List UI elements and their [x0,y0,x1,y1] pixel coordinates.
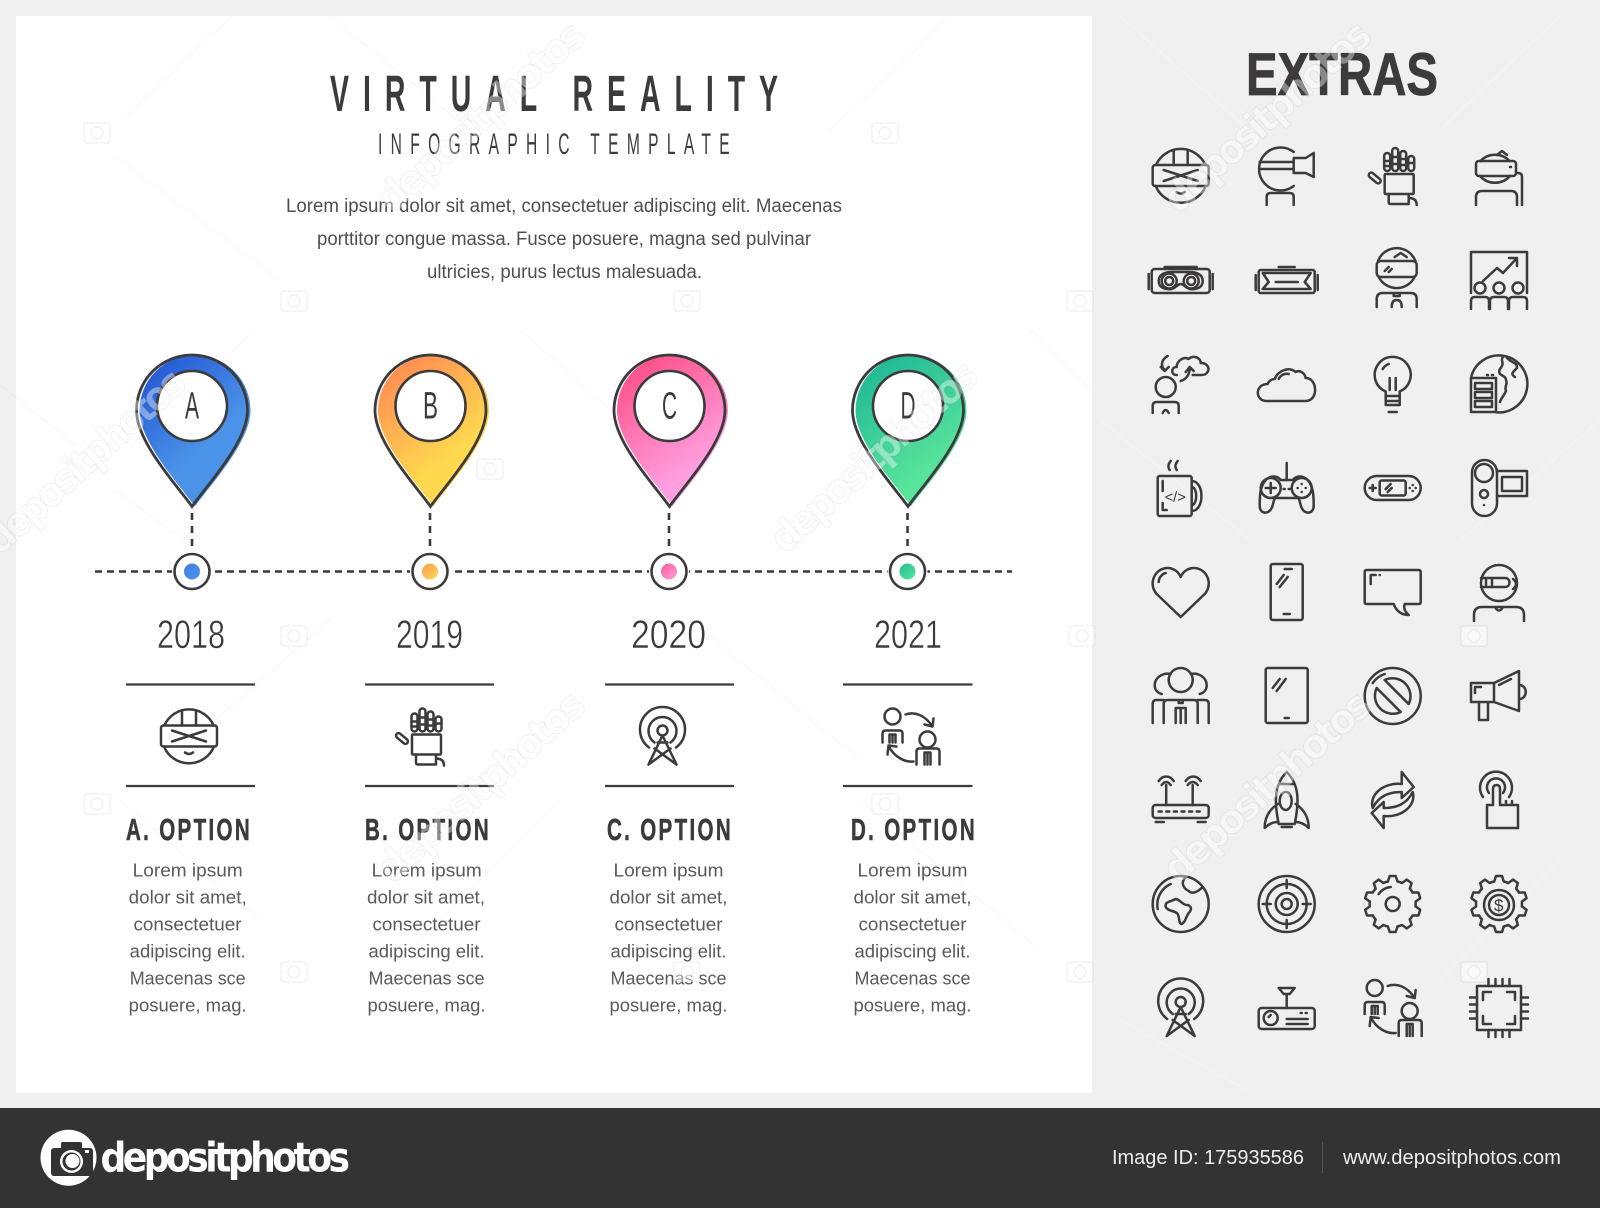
icon: binocular goggles [1149,267,1213,293]
icon: wifi router [1153,776,1209,822]
intro text block: porttitor congue massa. Fusce posuere, magna sed pulvinar [317,229,812,250]
icon: VR head [161,709,217,763]
intro text block: Lorem ipsum dolor sit amet, consectetuer adipiscing elit. Maecenas [286,196,842,217]
watermarks [0,13,1487,982]
year 2021: 2021 [874,613,942,657]
column B: 2019 [365,355,494,1016]
icon: headset front [1256,267,1318,293]
logo mark [40,1130,96,1186]
icon: VR camera user [1259,148,1314,205]
image id: Image ID: 175935586 [1112,1147,1304,1169]
icon: refresh arrows [1372,772,1414,828]
icon: team [1153,668,1209,723]
text B [367,860,486,1016]
pin B: B [423,386,438,428]
year 2020: 2020 [631,613,706,657]
pin A: A [185,386,199,428]
icon: radio tower [1158,978,1203,1036]
pin A [136,355,250,506]
text A: consectetuer [134,914,242,934]
icon: smartphone [1271,564,1303,620]
intro text block [286,196,842,283]
icon: satellite receiver [1259,988,1315,1029]
icon: gear [1363,876,1422,932]
icon: speech bubble [1365,570,1421,615]
connector and node B [410,513,450,592]
icon: VR glove [395,708,444,766]
icon: heart [1153,568,1209,617]
icon: money gear [1469,876,1529,932]
text C [610,860,728,1016]
icon: target [1259,876,1315,932]
text D: Maecenas sce [854,968,970,988]
year 2019: 2019 [396,613,463,657]
icon: person with side headset [1474,565,1524,621]
icon: VR glove [1368,148,1417,205]
text A: adipiscing elit. [130,942,246,962]
text A [129,860,247,1016]
column D: 2021 [843,355,977,1016]
text B: Lorem ipsum [372,860,482,880]
text C: posuere, mag. [610,996,728,1016]
icon: globe server [1471,355,1527,412]
text C: dolor sit amet, [610,888,728,908]
pin C: C [662,386,677,428]
icon: touch hand [1480,772,1518,828]
text D: adipiscing elit. [854,942,970,962]
icon: code mug [1158,461,1201,516]
pin D [852,355,966,506]
text D: posuere, mag. [854,996,972,1016]
watermarks: depositphotos [368,683,593,892]
pin D: D [900,386,916,428]
footer bar [0,1108,1600,1208]
icon: prohibited sign [1365,668,1421,724]
text A: dolor sit amet, [129,888,247,908]
connector and node C [649,513,689,592]
icon: people exchange [1365,980,1422,1036]
text D [854,860,972,1016]
text C: Maecenas sce [610,968,726,988]
column A: 2018 [126,355,255,1016]
icon: people exchange [882,708,940,764]
title: VIRTUAL REALITY [330,65,792,122]
watermarks: depositphotos [1154,13,1379,222]
text B: dolor sit amet, [367,888,485,908]
watermarks: depositphotos [368,13,593,222]
pin C [614,355,728,506]
icon: megaphone [1471,671,1526,720]
icon: presentation chart audience [1471,252,1527,309]
text D: consectetuer [858,914,967,934]
text D: dolor sit amet, [854,888,972,908]
heading B: B. OPTION [365,812,491,847]
text C: adipiscing elit. [610,942,726,962]
text C: Lorem ipsum [614,860,724,880]
logo wordmark: depositphotos [100,1134,349,1182]
heading A: A. OPTION [126,812,252,847]
icon: rocket [1265,772,1309,828]
text B: posuere, mag. [368,996,486,1016]
text B: consectetuer [372,914,481,934]
watermarks: depositphotos [1154,683,1379,892]
text C: consectetuer [614,914,723,934]
column C: 2020 [605,355,734,1016]
icon: code mug: </> [1165,489,1186,506]
connector and node D [888,513,928,592]
panel: extras icon grid [1149,41,1529,1037]
extras heading: EXTRAS [1246,41,1438,108]
pin B [375,355,489,506]
watermarks: depositphotos [761,353,986,562]
icon: money gear: $ [1494,896,1504,915]
icon: brainstorm person [1153,356,1208,413]
icon: gamepad [1260,463,1314,513]
icon: processor chip [1470,979,1528,1037]
icon: handheld console [1365,476,1421,500]
icon: cloud [1258,369,1315,401]
text B: adipiscing elit. [368,942,484,962]
connector and node A [172,513,212,592]
icon: globe [1153,876,1209,932]
text A: Maecenas sce [130,968,246,988]
icon: light bulb [1375,357,1411,412]
site url: www.depositphotos.com [1342,1147,1561,1169]
text B: Maecenas sce [368,968,484,988]
heading C: C. OPTION [607,812,733,847]
timeline dashed axis [95,570,1012,573]
text A: Lorem ipsum [133,860,243,880]
intro text block: ultricies, purus lectus malesuada. [427,262,702,283]
icon: headset user with cable [1476,151,1522,205]
year 2018: 2018 [157,613,225,657]
icon: goggles person [1377,248,1417,307]
text D: Lorem ipsum [858,860,968,880]
icon: radio tower [640,707,685,764]
icon: camcorder [1472,460,1527,516]
icon: VR head [1153,149,1209,203]
text A: posuere, mag. [129,996,247,1016]
icon: tablet [1266,668,1308,723]
subtitle: INFOGRAPHIC TEMPLATE [378,128,738,161]
heading D: D. OPTION [851,812,977,847]
